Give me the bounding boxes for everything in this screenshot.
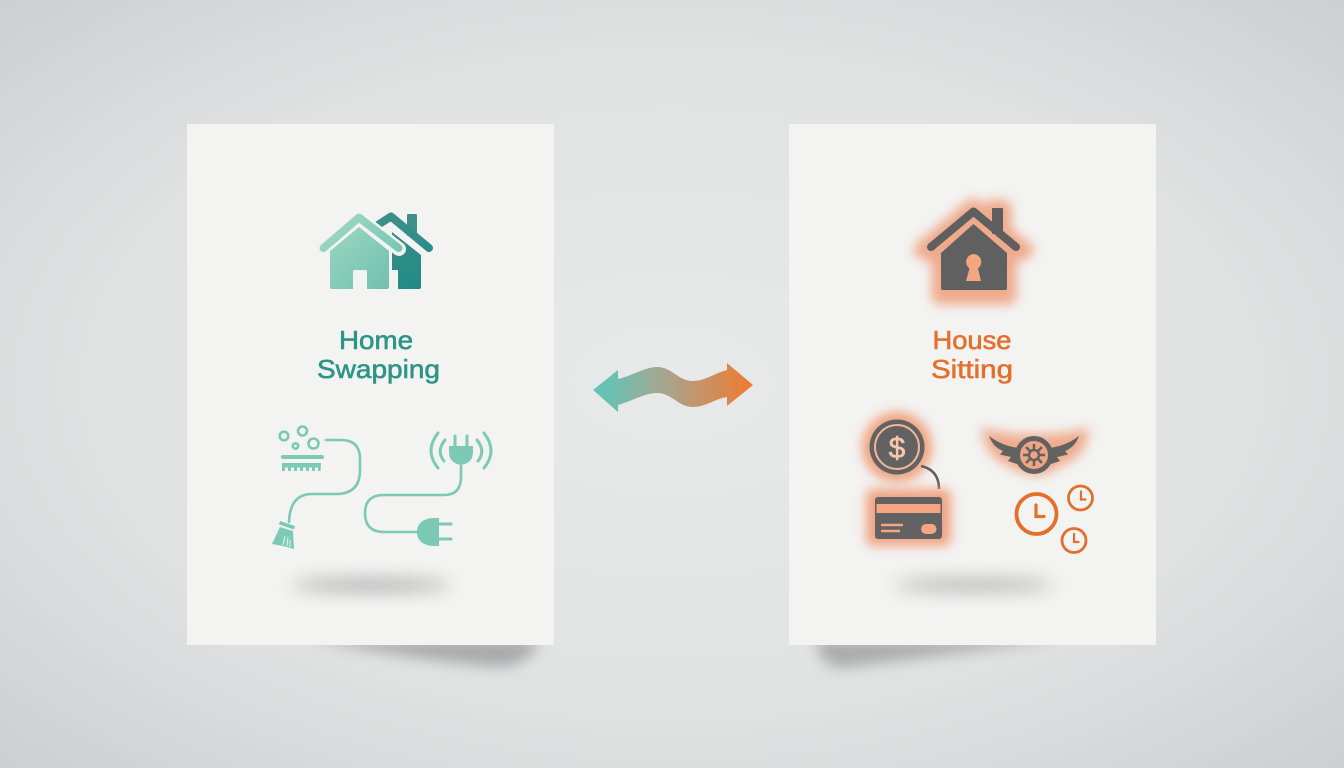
heading: home swapping bbox=[317, 325, 440, 384]
icon: two houses bbox=[323, 214, 429, 289]
heading: house sitting bbox=[931, 325, 1013, 384]
icon: credit card bbox=[866, 489, 951, 546]
plug with signal arcs bbox=[431, 433, 491, 468]
icon: brush and bubbles with cord to broom bbox=[272, 426, 491, 549]
icon: locked house with glow bbox=[922, 207, 1025, 296]
icon: dollar coin: $ bbox=[889, 432, 906, 465]
ground shadow bbox=[894, 579, 1054, 591]
bubbles bbox=[280, 426, 318, 449]
front house bbox=[324, 218, 398, 289]
arrow: two-way wavy arrow bbox=[593, 363, 753, 412]
front roof halo bbox=[323, 218, 399, 249]
icon: dollar coin bbox=[862, 412, 932, 482]
heading: house sitting: House bbox=[932, 325, 1012, 355]
heading: home swapping: Home bbox=[339, 325, 413, 355]
heading: home swapping: Swapping bbox=[317, 354, 440, 384]
cord bbox=[365, 465, 461, 532]
panel shadow: right bbox=[815, 640, 1060, 668]
panel: house sitting bbox=[789, 124, 1156, 645]
connector to broom bbox=[289, 440, 360, 522]
back house bbox=[370, 214, 429, 289]
icon: winged wheel bbox=[984, 431, 1086, 473]
panel shadow: left bbox=[310, 640, 540, 667]
panel: home swapping bbox=[187, 124, 554, 645]
broom bbox=[272, 521, 295, 549]
lower plug bbox=[417, 518, 439, 546]
icon: clocks bbox=[1016, 486, 1092, 552]
ground shadow bbox=[291, 579, 451, 591]
connector coin to card bbox=[921, 466, 939, 489]
heading: house sitting: Sitting bbox=[931, 354, 1013, 384]
scrub brush bbox=[283, 455, 322, 459]
